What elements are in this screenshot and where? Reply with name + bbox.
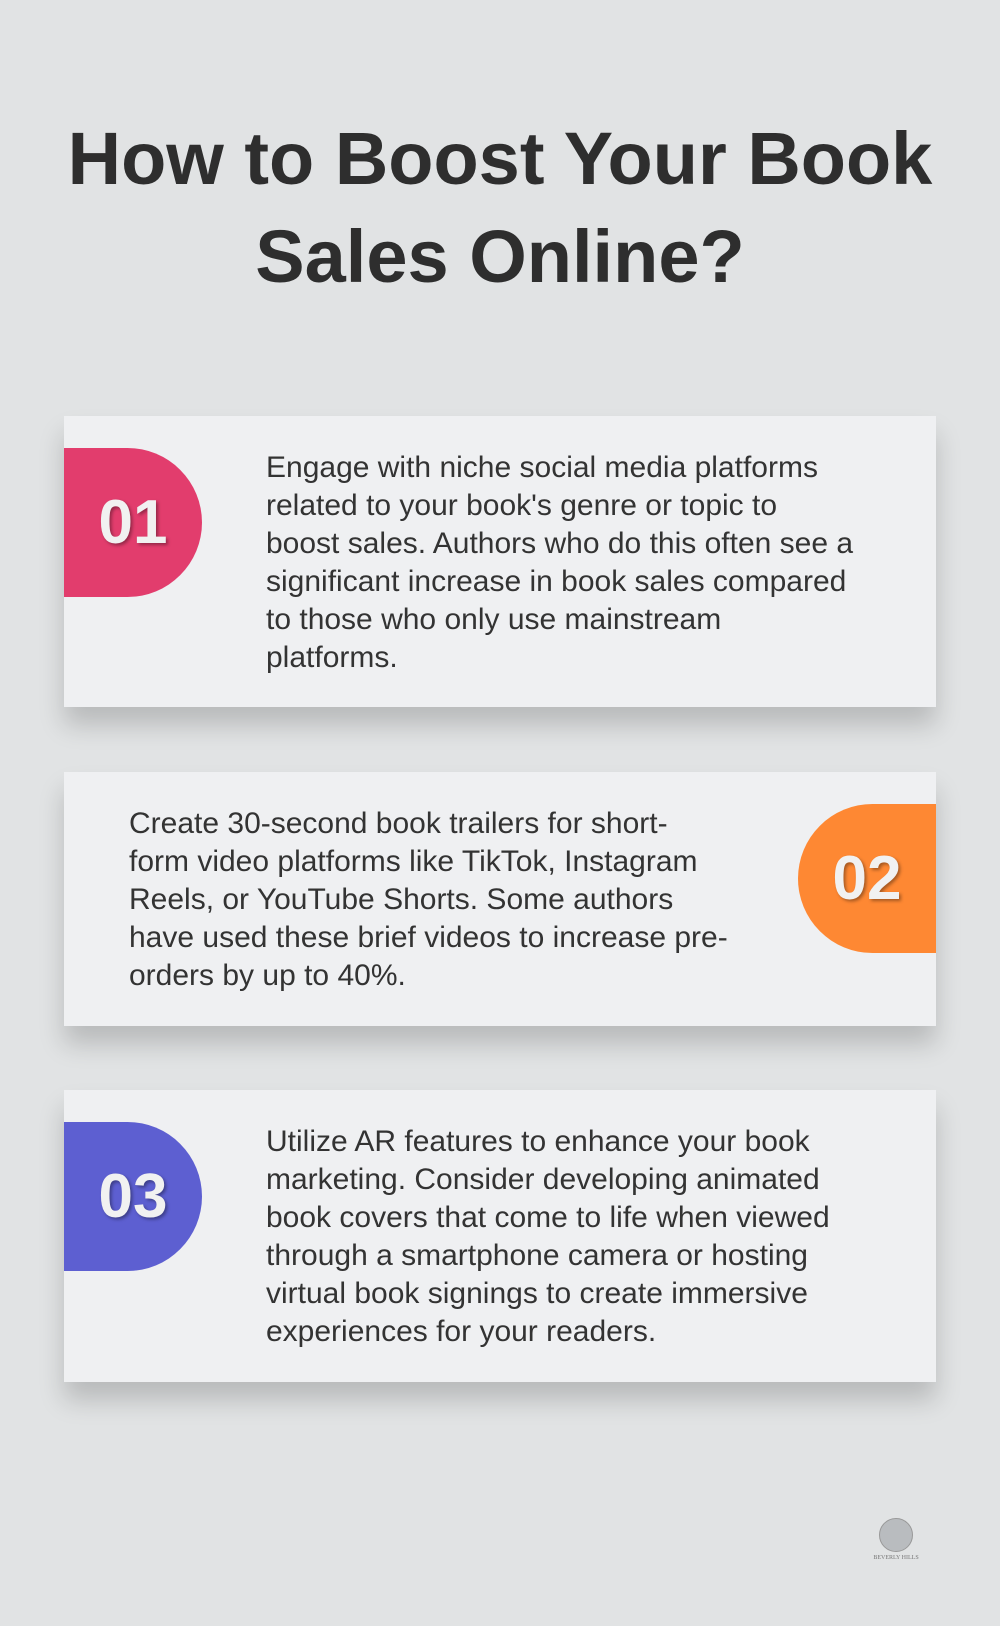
badge 01 <box>64 448 202 597</box>
title <box>68 117 932 298</box>
text 2: have used these brief videos to increase pre- <box>129 921 728 954</box>
panel: card 2 <box>64 772 936 1026</box>
panel: card 1 <box>64 416 936 707</box>
text 3: virtual book signings to create immersive <box>266 1277 808 1310</box>
text 3: marketing. Consider developing animated <box>266 1163 820 1196</box>
text 3: through a smartphone camera or hosting <box>266 1239 808 1272</box>
badge 02: 02 <box>833 844 901 913</box>
text 2: Create 30-second book trailers for short- <box>129 807 668 840</box>
title: Sales Online? <box>255 215 745 298</box>
text 3: book covers that come to life when viewed <box>266 1201 830 1234</box>
text 1: boost sales. Authors who do this often see a <box>266 527 853 560</box>
text 1: significant increase in book sales compared <box>266 565 846 598</box>
text 1: related to your book's genre or topic to <box>266 489 777 522</box>
badge 02 <box>798 804 936 953</box>
text 2: form video platforms like TikTok, Instagram <box>129 845 698 878</box>
badge 03: 03 <box>99 1162 167 1231</box>
text 3: experiences for your readers. <box>266 1315 656 1348</box>
text 1: platforms. <box>266 641 398 674</box>
badge 03 <box>64 1122 202 1271</box>
text 2 <box>129 807 728 992</box>
text 1: to those who only use mainstream <box>266 603 721 636</box>
text 1 <box>266 451 854 674</box>
panel: card 3 <box>64 1090 936 1382</box>
text 3: Utilize AR features to enhance your book <box>266 1125 810 1158</box>
badge 01: 01 <box>99 488 167 557</box>
text 2: Reels, or YouTube Shorts. Some authors <box>129 883 673 916</box>
text 2: orders by up to 40%. <box>129 959 406 992</box>
logo: BEVERLY HILLS <box>873 1555 919 1561</box>
text 1: Engage with niche social media platforms <box>266 451 818 484</box>
title: How to Boost Your Book <box>68 117 932 200</box>
text 3 <box>266 1125 830 1348</box>
logo <box>873 1518 919 1561</box>
